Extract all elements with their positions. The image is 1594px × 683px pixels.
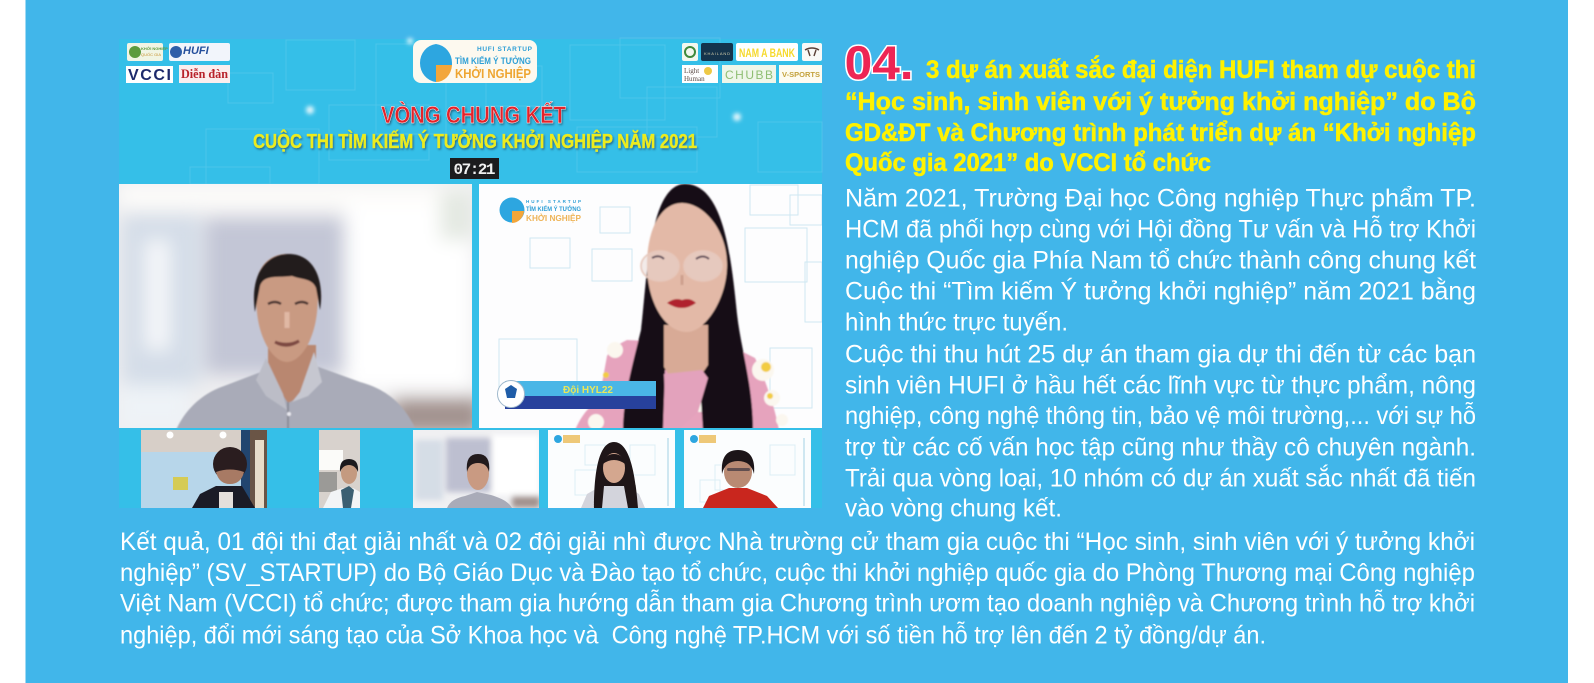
screenshot heading: CUỘC THI TÌM KIẾM Ý TƯỞNG KHỞI NGHIỆP NĂM 2021 bbox=[253, 129, 697, 153]
video: man speaking bbox=[119, 184, 482, 434]
right column body text: trợ từ các cố vấn học tập cũng như thầy cô chuyên ngành. bbox=[845, 434, 1476, 462]
yellow headline: “Học sinh, sinh viên với ý tưởng khởi nghiệp” do Bộ bbox=[845, 88, 1476, 116]
team logo on video: TÌM KIẾM Ý TƯỞNG bbox=[526, 203, 581, 213]
sponsor logos left: QUỐC GIA bbox=[141, 52, 161, 57]
thumbnail: office participant bbox=[141, 430, 267, 508]
pink floral top bbox=[575, 340, 783, 430]
sponsor logos right: Human bbox=[684, 75, 705, 83]
right column body text: Năm 2021, Trường Đại học Công nghiệp Thực phẩm TP. bbox=[845, 185, 1476, 213]
sponsor logos left: VCCI bbox=[128, 67, 171, 84]
right column body text: nghiệp Quốc gia Phía Nam tổ chức thành công chung kết bbox=[845, 246, 1476, 274]
full width body text: Kết quả, 01 đội thi đạt giải nhất và 02 đội giải nhì được Nhà trường cử tham gia cuộc thi “Học sinh, sinh viên với ý tưởng khởi bbox=[120, 528, 1475, 556]
nose and lips bbox=[680, 275, 684, 285]
yellow headline: Quốc gia 2021” do VCCI tổ chức bbox=[845, 149, 1211, 177]
video conference screenshot bbox=[119, 38, 822, 508]
neck bbox=[268, 345, 316, 403]
right column body text: hình thức trực tuyến. bbox=[845, 309, 1068, 337]
screenshot heading bbox=[253, 101, 697, 153]
collar bbox=[256, 358, 287, 410]
screenshot blue backdrop bbox=[119, 39, 822, 508]
sponsor logos left bbox=[126, 43, 230, 84]
shirt bbox=[176, 366, 416, 430]
contest logo: TÌM KIẾM Ý TƯỞNG bbox=[455, 55, 531, 66]
right column body text: Cuộc thi “Tìm kiếm Ý tưởng khởi nghiệp” năm 2021 bằng bbox=[845, 276, 1476, 305]
sponsor logos right: CHUBB bbox=[725, 68, 773, 82]
face bbox=[647, 203, 727, 332]
right column body text: sinh viên HUFI ở hầu hết các lĩnh vực từ thực phẩm, nông bbox=[845, 371, 1476, 399]
contest logo: KHỞI NGHIỆP bbox=[455, 66, 531, 81]
right column body text: vào vòng chung kết. bbox=[845, 495, 1062, 523]
hair bbox=[254, 254, 321, 312]
full width body text bbox=[120, 528, 1475, 649]
glow dots bbox=[306, 38, 741, 121]
contest logo: HUFI STARTUP bbox=[477, 46, 533, 53]
section number 04.: 04. bbox=[845, 36, 914, 89]
sponsor logos right: V-SPORTS bbox=[782, 70, 820, 79]
yellow headline: 3 dự án xuất sắc đại diện HUFI tham dự cuộc thi bbox=[926, 54, 1476, 84]
right column body text bbox=[845, 185, 1476, 523]
full width body text: Việt Nam (VCCI) tổ chức; được tham gia hướng dẫn tham gia Chương trình ươm tạo doanh nghiệp và Chương trình hỗ trợ khởi bbox=[120, 589, 1475, 618]
features bbox=[268, 302, 308, 304]
thumbnail: woman in red bbox=[684, 430, 811, 508]
right column body text: nghiệp, công nghệ thông tin, bảo vệ môi trường,... với sự hỗ bbox=[845, 401, 1476, 430]
face bbox=[256, 254, 318, 362]
thumbnail: woman in floral bbox=[548, 430, 675, 508]
screenshot heading: VÒNG CHUNG KẾT bbox=[381, 101, 566, 129]
team logo on video: HUFI STARTUP bbox=[526, 199, 581, 204]
pink neckline bbox=[662, 370, 710, 413]
sponsor logos right: NAM A BANK bbox=[739, 48, 796, 60]
name bar bbox=[498, 380, 656, 409]
contest logo bbox=[413, 40, 537, 83]
sponsor logos left: Diễn đàn bbox=[181, 66, 229, 81]
name bar: Đội HYL22 bbox=[563, 385, 613, 396]
sponsor logos left: HUFI bbox=[183, 45, 210, 57]
full width body text: nghiệp” (SV_STARTUP) do Bộ Giáo Dục và Đào tạo tổ chức, cuộc thi khởi nghiệp quốc gia do Phòng Thương mại Công nghiệp bbox=[120, 559, 1475, 587]
hair bbox=[623, 184, 753, 430]
right column body text: Trải qua vòng loại, 10 nhóm có dự án xuất sắc nhất đã tiến bbox=[845, 464, 1476, 493]
thumbnail: man speaking small bbox=[413, 430, 540, 508]
yellow headline bbox=[845, 54, 1476, 177]
sponsor logos left: KHỞI NGHIỆP bbox=[141, 46, 168, 51]
neck bbox=[664, 325, 708, 377]
right column body text: HCM đã phối hợp cùng với Hội đồng Tư vấn và Hỗ trợ Khởi bbox=[845, 214, 1476, 244]
full width body text: nghiệp, đổi mới sáng tạo của Sở Khoa học và Công nghệ TP.HCM với số tiền hỗ trợ lên đến 2 tỷ đồng/dự án. bbox=[120, 620, 1266, 649]
sponsor logos right: Light bbox=[684, 67, 699, 75]
team logo on video: KHỞI NGHIỆP bbox=[526, 214, 582, 223]
sponsor logos right: KHAILAND bbox=[704, 51, 730, 56]
thumbnail: man in white coat bbox=[319, 430, 360, 508]
timer: 07:21 bbox=[454, 161, 496, 179]
sponsor logos right bbox=[682, 43, 822, 83]
right column body text: Cuộc thi thu hút 25 dự án tham gia dự thi đến từ các bạn bbox=[845, 341, 1476, 369]
team logo on video bbox=[500, 198, 582, 223]
yellow headline: GD&ĐT và Chương trình phát triển dự án “Khởi nghiệp bbox=[845, 119, 1476, 147]
video: girl team member bbox=[479, 184, 822, 430]
glasses bbox=[641, 251, 722, 281]
